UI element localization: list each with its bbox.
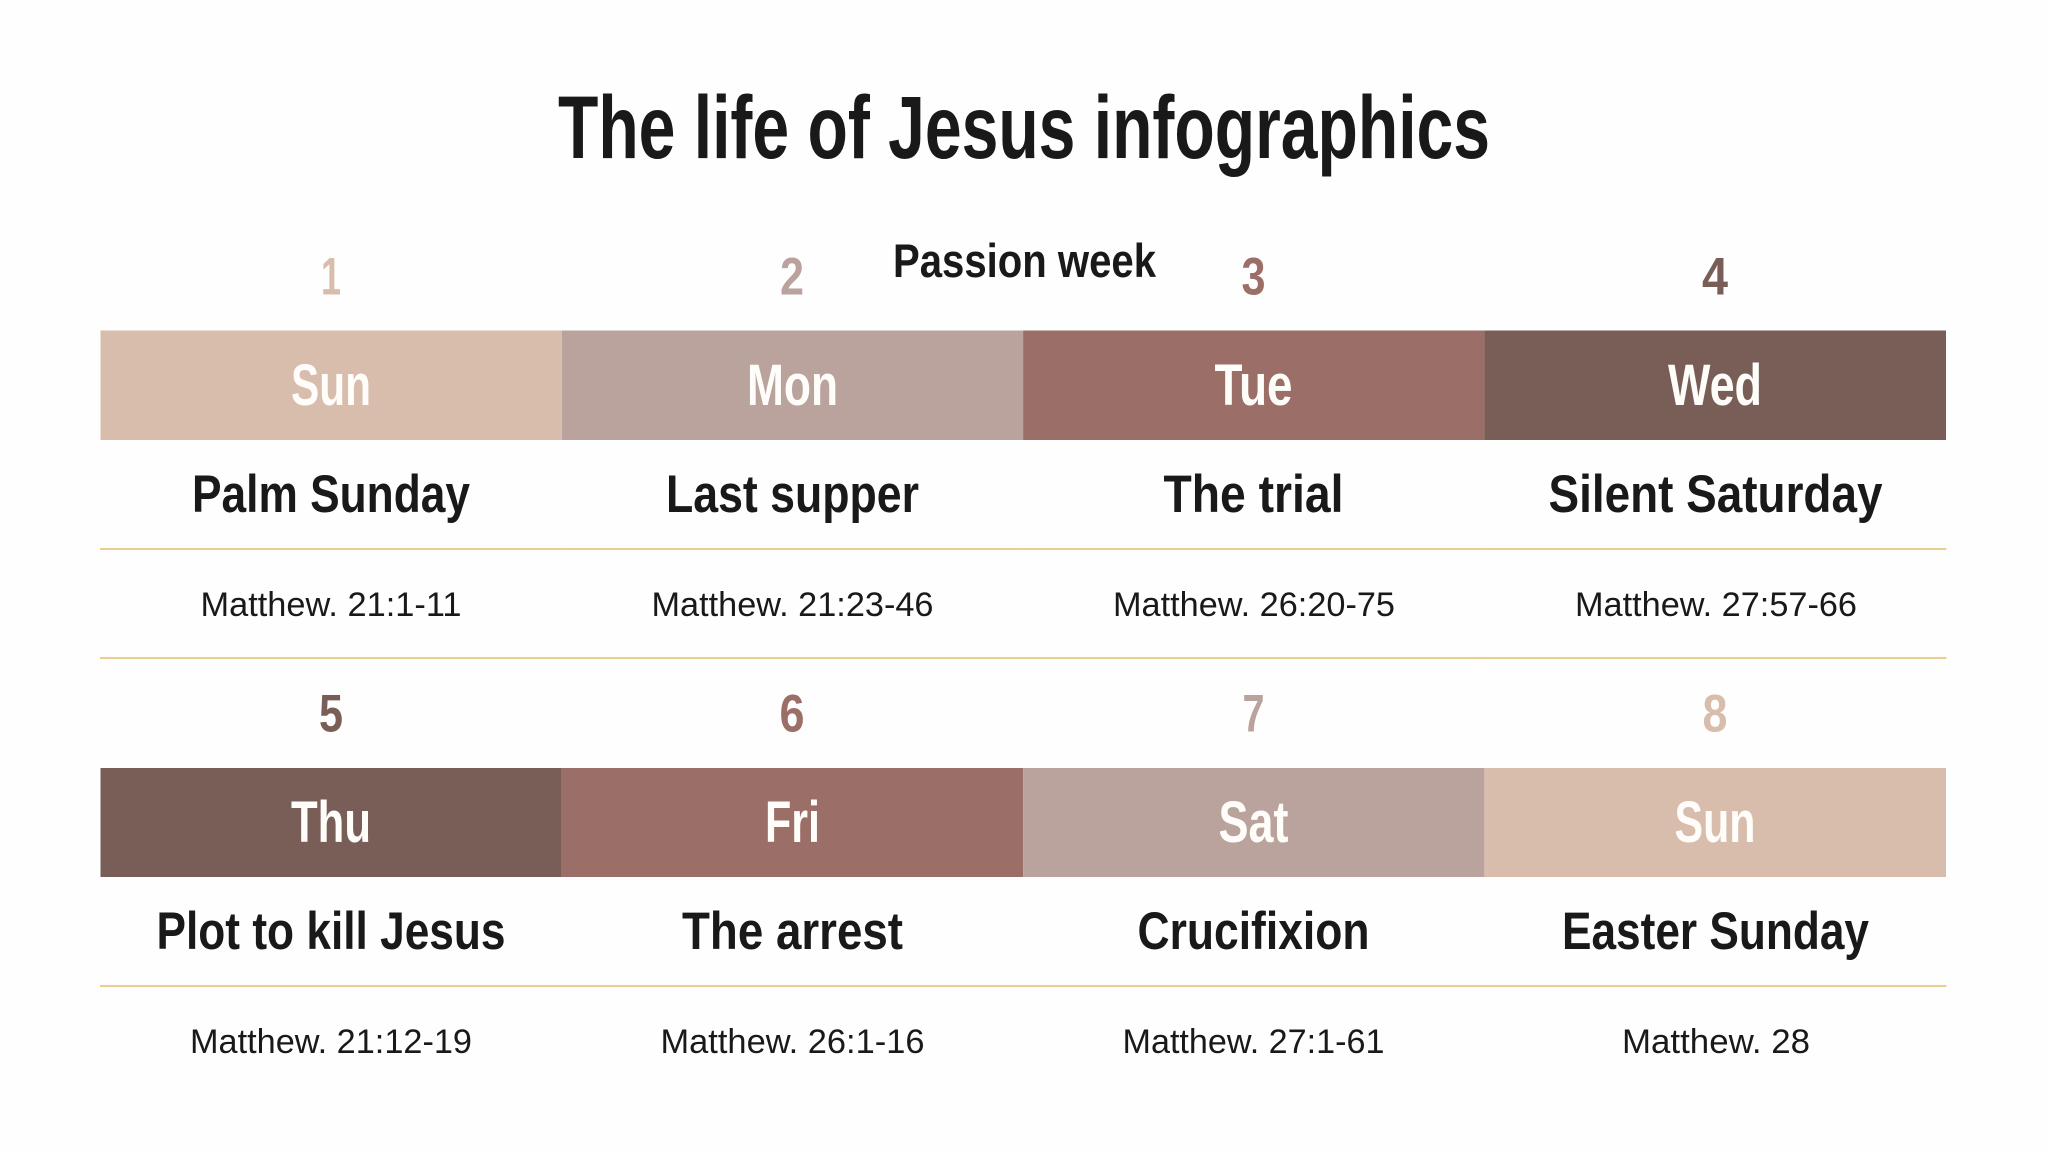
column: Thu, Plot to kill Jesus: Thu [291,790,371,855]
column: Sun, Easter Sunday: Easter Sunday [1562,902,1869,961]
column: Fri, The arrest: The arrest [682,902,903,961]
column: Wed, Silent Saturday: Wed [1668,353,1762,418]
column: Sun, Palm Sunday: Matthew. 21:1-11 [200,586,462,624]
column: Tue, The trial: The trial [1164,465,1344,524]
subtitle: Passion week [893,234,1157,287]
column: Wed, Silent Saturday: Silent Saturday [1548,465,1883,524]
column: Fri, The arrest: Fri [765,790,820,855]
column: Sun, Palm Sunday: Palm Sunday [192,465,470,524]
column: Thu, Plot to kill Jesus: 5 [319,684,343,744]
column: Thu, Plot to kill Jesus [100,684,562,1061]
column: Sat, Crucifixion [1023,684,1484,1061]
column: Sun, Easter Sunday: Sun [1674,790,1756,855]
row 2: passion week days 5 to 8 [100,684,1946,1061]
column: Mon, Last supper: Last supper [666,465,919,524]
column: Tue, The trial [1023,248,1484,659]
column: Wed, Silent Saturday: Matthew. 27:57-66 [1575,586,1857,624]
title: The life of Jesus infographics [558,77,1490,177]
column: Sun, Palm Sunday: 1 [321,248,341,306]
column: Sat, Crucifixion: Sat [1218,790,1288,855]
column: Tue, The trial: 3 [1242,248,1266,306]
row 1: passion week days 1 to 4 [100,248,1946,659]
column: Sun, Palm Sunday [100,248,562,659]
column: Mon, Last supper [562,248,1023,659]
column: Mon, Last supper: Mon [747,353,838,418]
column: Thu, Plot to kill Jesus: Matthew. 21:12-19 [190,1023,472,1061]
column: Wed, Silent Saturday: 4 [1702,248,1728,306]
column: Sat, Crucifixion: Matthew. 27:1-61 [1122,1023,1384,1061]
column: Sun, Palm Sunday: Sun [291,353,371,418]
column: Sun, Easter Sunday: Matthew. 28 [1622,1023,1810,1061]
column: Sun, Easter Sunday [1484,684,1946,1061]
column: Tue, The trial: Matthew. 26:20-75 [1113,586,1395,624]
column: Mon, Last supper: 2 [780,248,804,306]
column: Thu, Plot to kill Jesus: Plot to kill Jesus [156,902,506,961]
column: Sat, Crucifixion: 7 [1242,684,1264,744]
column: Tue, The trial: Tue [1214,353,1292,418]
column: Fri, The arrest [562,684,1023,1061]
column: Sat, Crucifixion: Crucifixion [1138,902,1370,961]
column: Fri, The arrest: 6 [780,684,804,744]
column: Mon, Last supper: Matthew. 21:23-46 [652,586,934,624]
column: Fri, The arrest: Matthew. 26:1-16 [660,1023,924,1061]
column: Sun, Easter Sunday: 8 [1702,684,1728,744]
column: Wed, Silent Saturday [1484,248,1946,659]
